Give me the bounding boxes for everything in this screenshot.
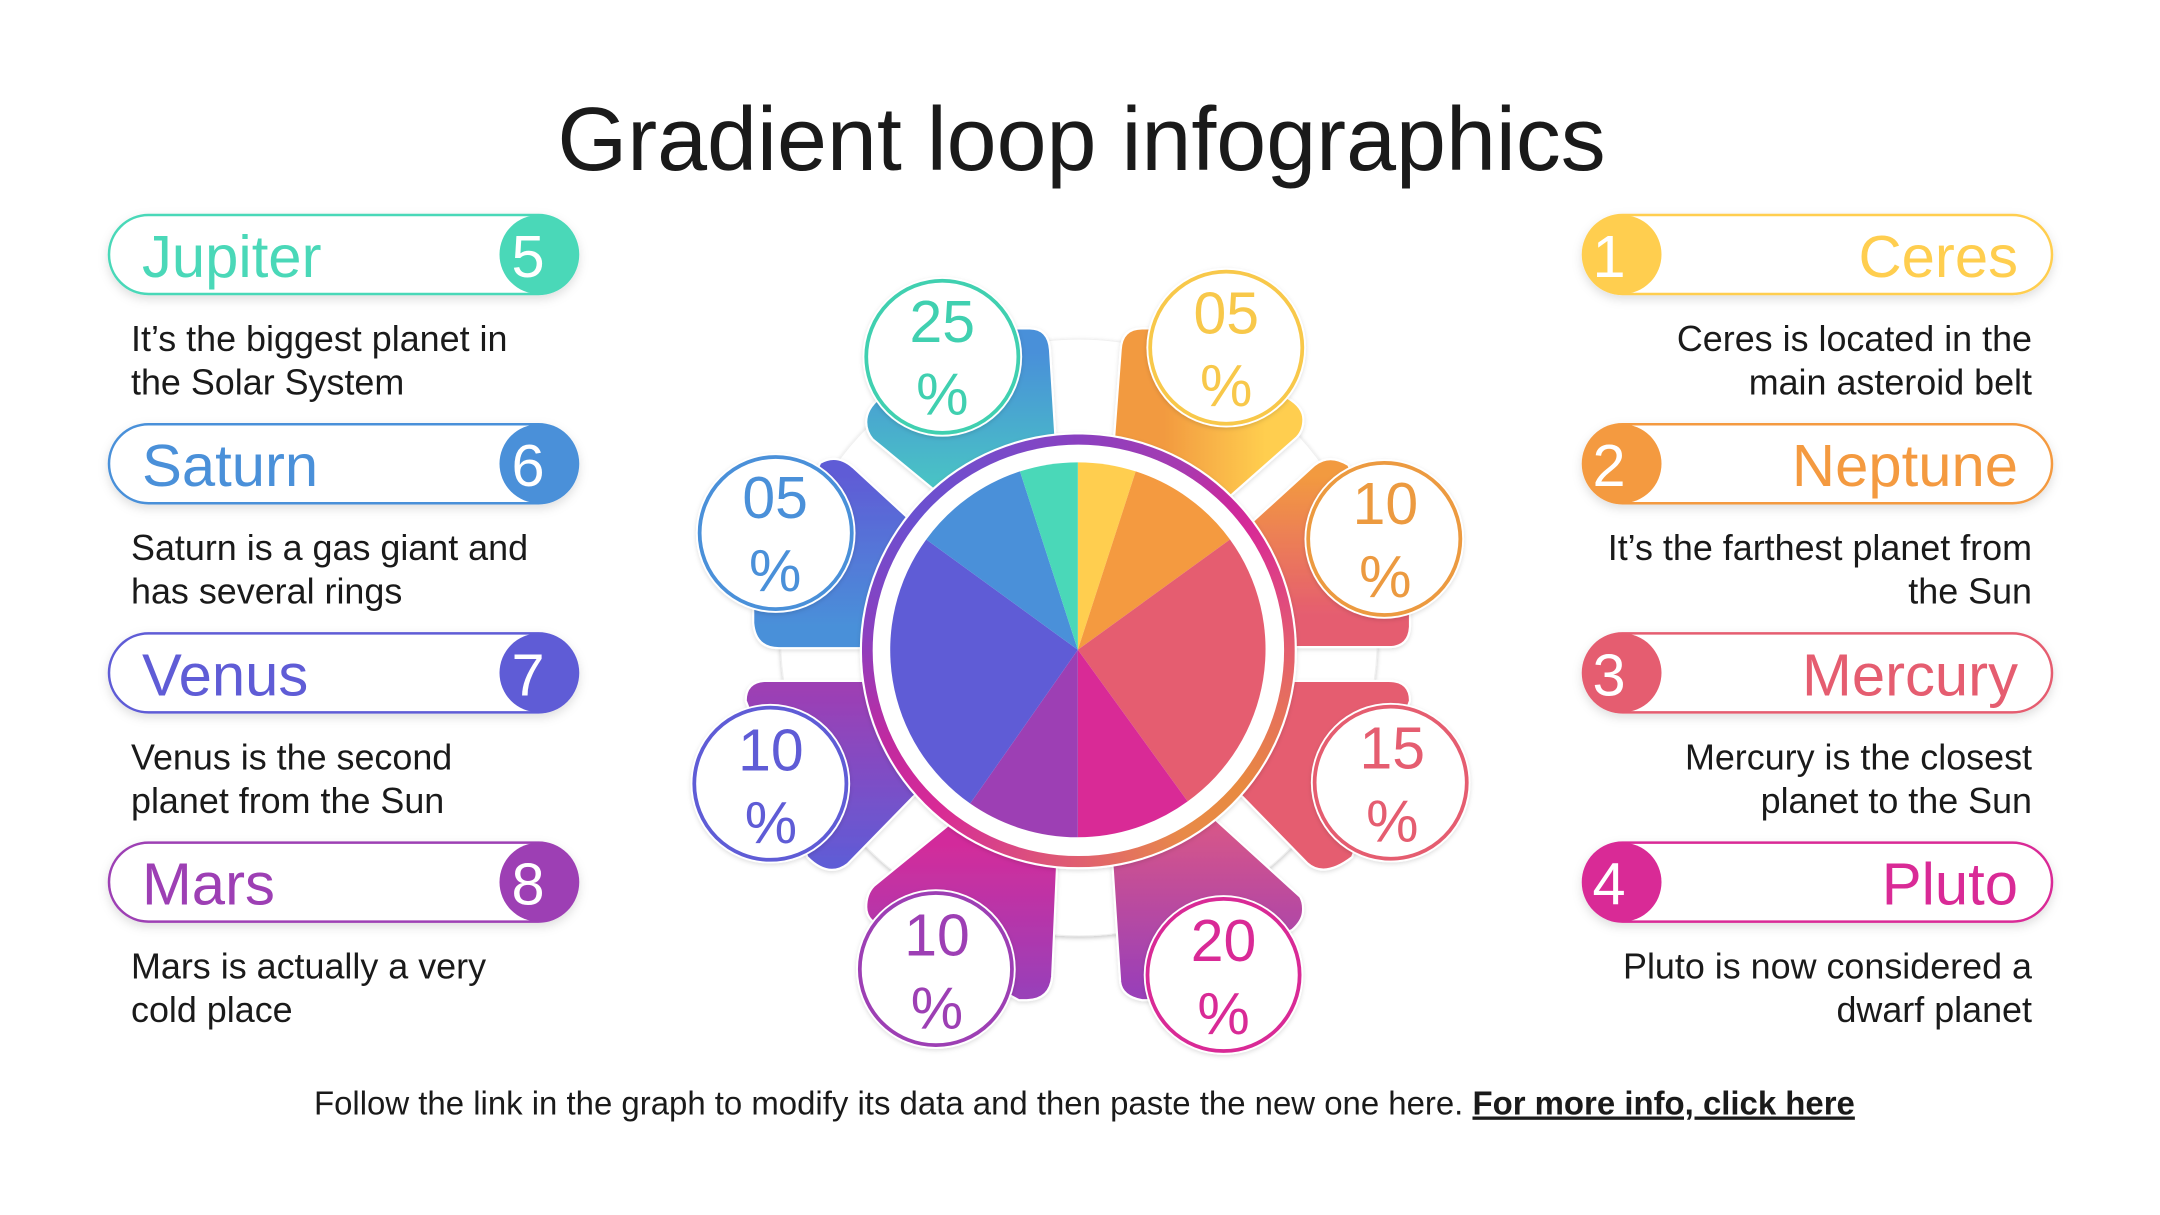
Jupiter pill <box>109 215 578 294</box>
panel: Mars <box>109 843 578 1030</box>
Pluto badge <box>1582 843 1662 922</box>
Venus pill <box>109 633 578 712</box>
Mercury name: Mercury <box>1802 641 2018 708</box>
Saturn number: 6 <box>511 432 545 499</box>
callout: 20 pink: 20 <box>1191 909 1256 974</box>
callout: 25 teal <box>862 277 1022 437</box>
panel: Jupiter <box>109 215 578 402</box>
Mars number: 8 <box>511 851 545 918</box>
callout: 10 purple: % <box>911 977 963 1042</box>
petal: blue to teal <box>866 328 1078 649</box>
callout: 05 yellow: 05 <box>1193 282 1259 347</box>
callout: 10 violet: 10 <box>738 718 804 783</box>
pie chart <box>890 462 1266 837</box>
Pluto description: Pluto is now considered a <box>1623 947 2032 987</box>
petal: purple to violet <box>746 649 1078 870</box>
Ceres description: main asteroid belt <box>1749 362 2032 402</box>
Mercury description: planet to the Sun <box>1761 781 2032 821</box>
Mercury pill <box>1583 633 2052 712</box>
petal: red <box>1078 649 1410 870</box>
panel: Pluto <box>1582 843 2052 1030</box>
callout: 15 red: 15 <box>1360 717 1425 782</box>
callout: 25 teal: % <box>916 363 969 428</box>
Ceres pill <box>1583 215 2052 294</box>
Jupiter badge <box>500 215 578 294</box>
Saturn name: Saturn <box>142 432 318 499</box>
callout: 10 violet: % <box>745 791 797 856</box>
Neptune number: 2 <box>1592 432 1626 499</box>
Ceres description: Ceres is located in the <box>1677 319 2032 359</box>
panel: Saturn <box>109 424 578 612</box>
Ceres badge <box>1582 215 1662 294</box>
panel: Mercury <box>1582 633 2052 821</box>
panel: Neptune <box>1582 424 2052 612</box>
Pluto pill <box>1583 843 2052 922</box>
callout: 20 pink: % <box>1197 982 1250 1047</box>
Mars description: Mars is actually a very <box>131 947 486 987</box>
Mars badge <box>500 843 578 922</box>
Jupiter description: It’s the biggest planet in <box>131 319 507 359</box>
callout: 05 blue <box>696 453 856 613</box>
Venus number: 7 <box>511 641 545 708</box>
Neptune description: the Sun <box>1908 572 2032 612</box>
Jupiter number: 5 <box>511 223 545 290</box>
Neptune pill <box>1583 424 2052 503</box>
callout: 05 yellow: % <box>1200 354 1252 419</box>
Saturn description: has several rings <box>131 572 402 612</box>
petal: magenta to purple <box>866 649 1078 1000</box>
petal: orange to yellow <box>1078 328 1303 649</box>
petal: violet to blue <box>753 459 1078 649</box>
Saturn description: Saturn is a gas giant and <box>131 528 528 568</box>
callout: 25 teal: 25 <box>910 290 975 355</box>
callout: 05 blue: % <box>749 539 801 604</box>
Venus badge <box>500 633 578 712</box>
Pluto number: 4 <box>1592 851 1626 918</box>
callout: 05 blue: 05 <box>742 466 808 531</box>
Venus name: Venus <box>142 641 308 708</box>
Venus description: Venus is the second <box>131 737 452 777</box>
Ceres name: Ceres <box>1858 223 2018 290</box>
petal: pink to purple <box>1078 649 1303 1000</box>
Jupiter name: Jupiter <box>142 223 321 290</box>
callout: 15 red <box>1311 703 1471 862</box>
callout: 10 violet <box>691 704 850 864</box>
callout: 10 orange <box>1304 459 1464 619</box>
petal: orange to red <box>1078 459 1410 649</box>
Pluto name: Pluto <box>1882 851 2018 918</box>
Ceres number: 1 <box>1592 223 1626 290</box>
central chart <box>691 268 1471 1055</box>
callout: 10 orange: 10 <box>1353 472 1418 537</box>
callout: 10 purple <box>856 889 1016 1049</box>
footer note: Follow the link in the graph to modify its data and then paste the new one here. For more info, click here <box>314 1084 1855 1122</box>
callout: 20 pink <box>1144 895 1303 1055</box>
Mars name: Mars <box>142 851 275 918</box>
Neptune badge <box>1582 424 1662 503</box>
title: Gradient loop infographics <box>557 90 1606 190</box>
center ring <box>860 432 1297 869</box>
Neptune name: Neptune <box>1792 432 2018 499</box>
Mars pill <box>109 843 578 922</box>
Mercury badge <box>1582 633 1662 712</box>
callout: 10 orange: % <box>1359 545 1412 610</box>
callout: 15 red: % <box>1366 790 1418 855</box>
Venus description: planet from the Sun <box>131 781 444 821</box>
Pluto description: dwarf planet <box>1836 990 2032 1030</box>
background ring <box>781 339 1377 936</box>
panel: Venus <box>109 633 578 821</box>
panel: Ceres <box>1582 215 2052 402</box>
Saturn badge <box>500 424 578 503</box>
callout: 05 yellow <box>1146 268 1306 427</box>
Jupiter description: the Solar System <box>131 362 404 402</box>
callout: 10 purple: 10 <box>904 904 970 969</box>
Mercury description: Mercury is the closest <box>1685 737 2032 777</box>
Saturn pill <box>109 424 578 503</box>
Mercury number: 3 <box>1592 641 1626 708</box>
Mars description: cold place <box>131 990 293 1030</box>
Neptune description: It’s the farthest planet from <box>1608 528 2032 568</box>
